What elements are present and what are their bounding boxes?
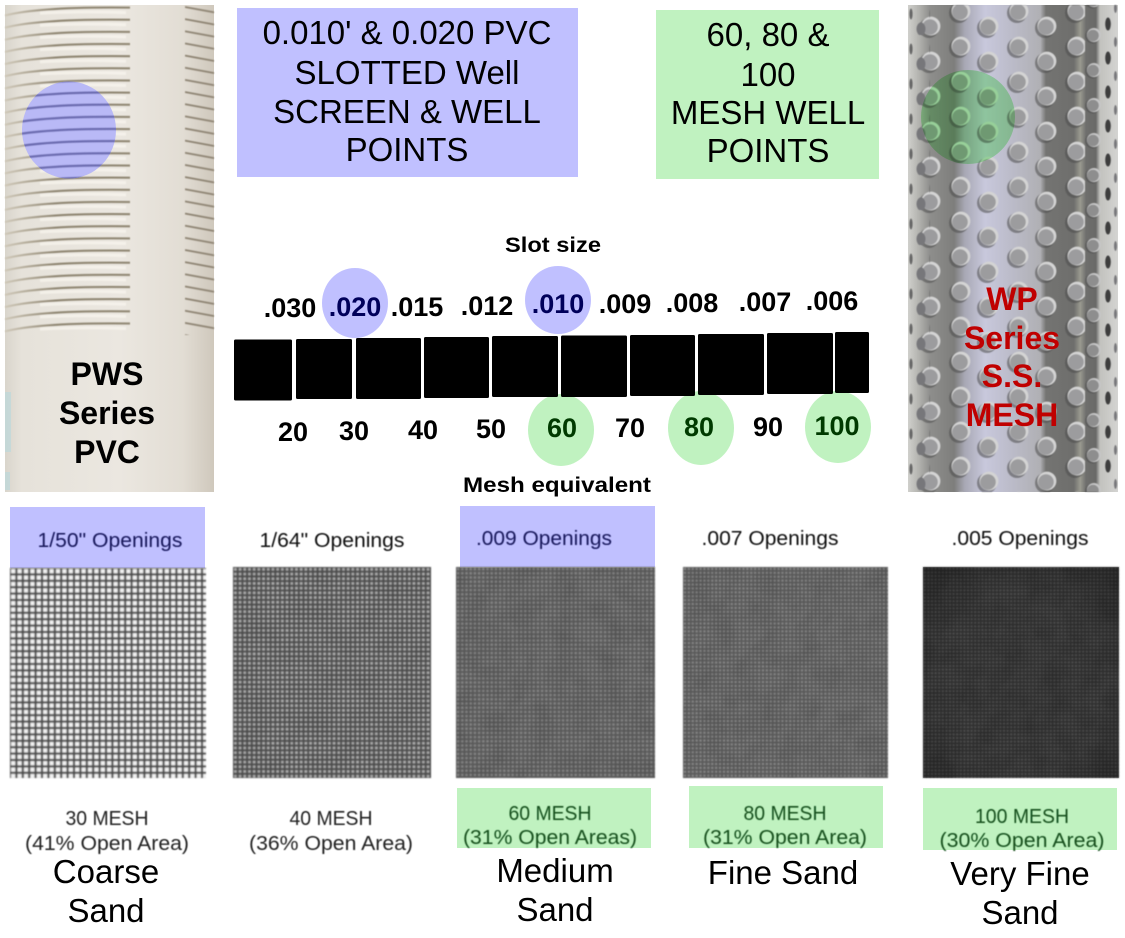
labels: slot sizes [264, 286, 858, 323]
panel: 40 mesh: 40 MESH [290, 808, 372, 830]
panel: 100 mesh very fine sand: 100 MESH [975, 806, 1069, 828]
labels: mesh numbers [278, 411, 860, 447]
labels: slot sizes: .010 [532, 289, 584, 319]
heading: mesh well points: MESH WELL [671, 94, 865, 131]
label: Very Fine Sand: Very Fine [950, 855, 1090, 892]
labels: slot sizes: .015 [391, 292, 443, 322]
labels: slot sizes: .007 [739, 287, 791, 317]
label: PWS Series PVC: PWS [71, 356, 143, 392]
label: Coarse Sand [53, 853, 159, 929]
mesh swatch: 30 mesh [10, 568, 206, 778]
mesh swatch: 40 mesh [233, 567, 431, 778]
labels: slot sizes: .030 [264, 293, 316, 323]
label: PWS Series PVC [59, 356, 155, 470]
label: WP Series S.S. MESH [964, 281, 1060, 433]
labels: mesh numbers: 20 [278, 417, 308, 447]
labels: mesh numbers: 50 [476, 414, 506, 444]
label: WP Series S.S. MESH: S.S. [982, 358, 1042, 394]
label: Fine Sand: Fine Sand [708, 854, 858, 891]
labels: mesh numbers: 70 [615, 413, 645, 443]
label: Very Fine Sand [950, 855, 1090, 931]
panel: 80 mesh fine sand: .007 Openings [702, 528, 838, 550]
highlights: selected mesh sizes [528, 391, 871, 466]
panel: 100 mesh very fine sand: (30% Open Area) [940, 830, 1104, 852]
panel: 80 mesh fine sand: 80 MESH [744, 803, 826, 825]
label: Medium Sand: Medium [496, 852, 614, 889]
heading: mesh well points [656, 10, 879, 179]
heading: mesh well points: 60, 80 & [707, 16, 829, 53]
panel: 30 mesh coarse sand: 30 MESH [66, 808, 148, 830]
panel: 80 mesh fine sand [683, 528, 888, 891]
highlight circle: mesh perforations [921, 70, 1015, 164]
labels: slot sizes: .009 [599, 289, 651, 319]
label: PWS Series PVC: PVC [74, 434, 140, 470]
panel: 80 mesh fine sand: (31% Open Area) [703, 827, 867, 849]
label: PWS Series PVC: Series [59, 395, 155, 431]
mesh swatch: 80 mesh [683, 567, 888, 778]
highlight circle: PVC slots [22, 82, 116, 178]
heading: PVC slotted well screen: POINTS [346, 131, 468, 168]
panel: 40 mesh: (36% Open Area) [249, 833, 413, 855]
mesh swatch: 100 mesh [923, 567, 1119, 778]
panel: 60 mesh medium sand [456, 506, 655, 928]
heading: mesh well points: 100 [740, 56, 796, 93]
panel: 100 mesh very fine sand [923, 528, 1119, 931]
labels: mesh numbers: 100 [814, 411, 860, 441]
panel: 100 mesh very fine sand: .005 Openings [952, 528, 1088, 550]
panel: 60 mesh medium sand: 60 MESH [508, 803, 592, 825]
heading: PVC slotted well screen [237, 8, 578, 177]
labels: slot sizes: .012 [461, 291, 513, 321]
label: WP Series S.S. MESH: WP [986, 281, 1038, 317]
labels: mesh numbers: 90 [753, 412, 783, 442]
axis title: mesh equivalent: Mesh equivalent [463, 474, 651, 497]
panel: stainless steel mesh pipe photo [908, 5, 1118, 492]
labels: slot sizes: .020 [329, 292, 381, 322]
label: Very Fine Sand: Sand [981, 894, 1059, 931]
panel: 40 mesh: 1/64" Openings [260, 530, 404, 552]
labels: mesh numbers: 80 [684, 412, 714, 442]
labels: slot sizes: .008 [666, 288, 718, 318]
panel: 30 mesh coarse sand [10, 507, 206, 929]
labels: mesh numbers: 60 [547, 413, 577, 443]
scale: black bar segments [234, 332, 869, 400]
axis title: slot size: Slot size [505, 234, 601, 257]
label: WP Series S.S. MESH: Series [964, 320, 1060, 356]
chart: slot size to mesh equivalent scale [234, 234, 871, 497]
panel: 30 mesh coarse sand: (41% Open Area) [25, 833, 189, 855]
mesh swatch: 60 mesh [456, 567, 655, 778]
labels: slot sizes: .006 [806, 286, 858, 316]
panel: 60 mesh medium sand: (31% Open Areas) [463, 827, 637, 849]
panel: 30 mesh coarse sand: 1/50" Openings [38, 530, 182, 552]
heading: mesh well points: POINTS [707, 132, 829, 169]
labels: mesh numbers: 40 [408, 415, 438, 445]
panel: PVC slotted pipe photo [5, 5, 214, 492]
panel: 60 mesh medium sand: .009 Openings [476, 528, 612, 550]
labels: mesh numbers: 30 [339, 416, 369, 446]
label: WP Series S.S. MESH: MESH [966, 397, 1058, 433]
heading: PVC slotted well screen: 0.010' & 0.020 PVC [263, 14, 551, 51]
label: Medium Sand: Sand [516, 891, 594, 928]
heading: PVC slotted well screen: SCREEN & WELL [273, 93, 541, 130]
label: Coarse Sand: Sand [67, 892, 145, 929]
highlights: selected slot sizes [322, 266, 591, 338]
panel: 40 mesh [233, 530, 431, 855]
label: Medium Sand [496, 852, 614, 928]
label: Coarse Sand: Coarse [53, 853, 159, 890]
heading: PVC slotted well screen: SLOTTED Well [295, 54, 519, 91]
